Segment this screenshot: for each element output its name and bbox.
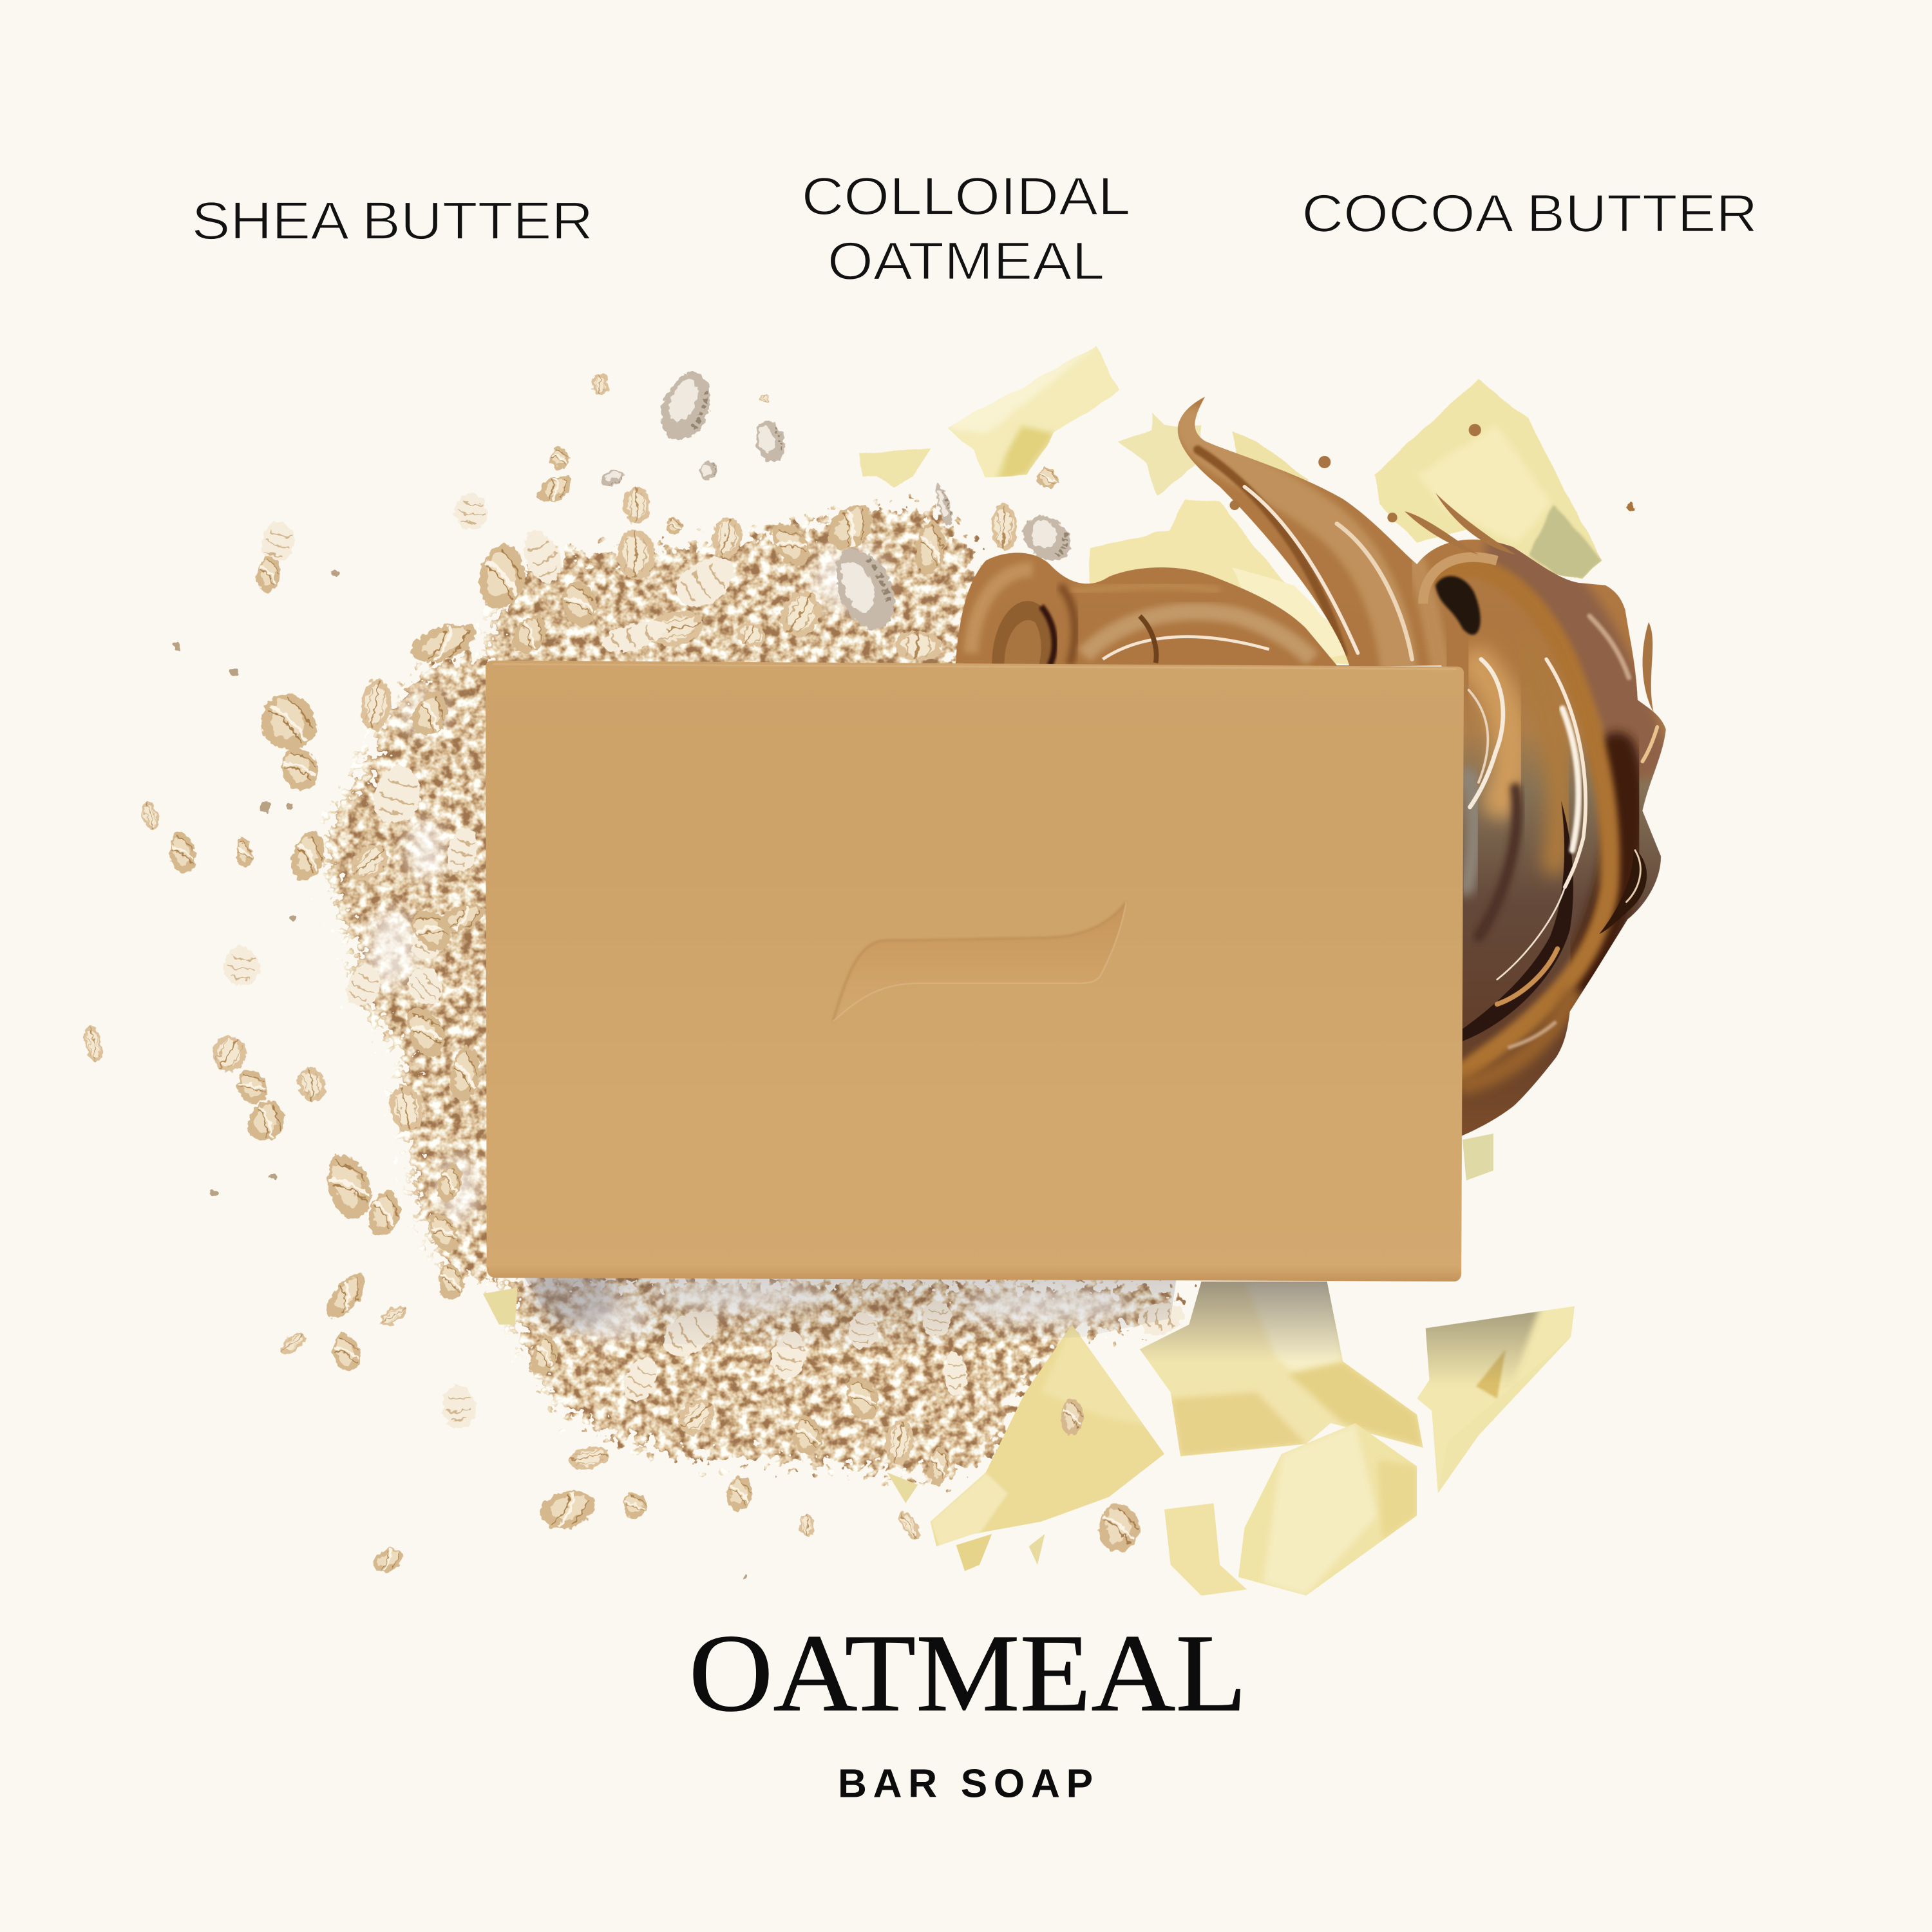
- caramel: soft colour bands: [1435, 552, 1639, 1084]
- caramel butter swirl: [949, 394, 1688, 1146]
- cocoa butter chunks: bottom: [483, 1133, 1575, 1596]
- caramel: swoosh bands: [1193, 425, 1442, 672]
- chunk: small piece: [859, 450, 931, 487]
- chunk: under caramel: [1463, 1133, 1493, 1180]
- ingredient label: colloidal oatmeal: [802, 167, 1130, 290]
- caramel droplets and splash: [1229, 424, 1654, 712]
- oat flakes: loose top side: [452, 365, 1061, 534]
- caramel: outer dark swirl: [1599, 848, 1647, 934]
- soap: body: [486, 661, 1464, 1282]
- caramel: right swirl lip: [1423, 557, 1497, 604]
- caramel: left blob streaks: [1072, 585, 1312, 663]
- soap: top edge highlight: [493, 664, 1456, 669]
- chunk: middle behind caramel: [1084, 499, 1356, 665]
- oat flakes in heap: left: [339, 677, 489, 1300]
- cocoa butter chunks: top: [859, 346, 1602, 665]
- soap shadow on heap: [524, 1276, 1177, 1349]
- chunk: star piece: [1119, 413, 1201, 495]
- soap shadow patch on left of heap: [531, 1259, 615, 1328]
- soap: embossed logo: [833, 902, 1126, 1021]
- caramel: left loop: [971, 569, 1075, 665]
- caramel: main mass: [949, 394, 1688, 1146]
- tiny crumbs: [174, 504, 1635, 1579]
- oat flakes in heap: top: [406, 497, 1080, 670]
- oat pile: main heap: [326, 509, 1173, 1474]
- chunk: lower right: [1238, 1423, 1417, 1596]
- chunk: small behind swoosh: [1232, 431, 1309, 483]
- ingredient label: colloidal oatmeal: OATMEAL: [828, 232, 1104, 290]
- caramel: dark crack: [1463, 801, 1573, 1041]
- caramel: right swirl hole: [1435, 576, 1481, 635]
- oat flakes in heap: bottom: [527, 1298, 1186, 1512]
- subtitle: BAR SOAP: [838, 1761, 1093, 1806]
- soap bar: [486, 661, 1464, 1282]
- stray pale pieces: [483, 1287, 1045, 1565]
- title: OATMEAL: [689, 1613, 1247, 1735]
- chunk: left slab: [931, 1325, 1164, 1546]
- chunk: upper left bar: [946, 346, 1119, 480]
- chunk: large top: [1140, 1269, 1423, 1456]
- chunk: lower small: [1164, 1503, 1247, 1596]
- ingredient label: shea butter: SHEA BUTTER: [192, 192, 593, 251]
- ingredient label: cocoa butter: COCOA BUTTER: [1302, 185, 1757, 243]
- chunk: large right block: [1374, 379, 1602, 579]
- chunk: tail under left slab: [956, 1534, 992, 1571]
- caramel: glossy highlights: [1469, 616, 1657, 1047]
- ingredient label: colloidal oatmeal: COLLOIDAL: [802, 167, 1130, 226]
- chunk: floating shard: [1405, 1306, 1575, 1493]
- oat flake beside butter: [1095, 1500, 1144, 1555]
- oat flakes: loose left side: [82, 517, 923, 1575]
- oat pile: white dust patches: [367, 547, 1133, 1341]
- oat flakes: scattered on heap and around: [82, 365, 1635, 1579]
- oat flake over butter: [1059, 1397, 1085, 1436]
